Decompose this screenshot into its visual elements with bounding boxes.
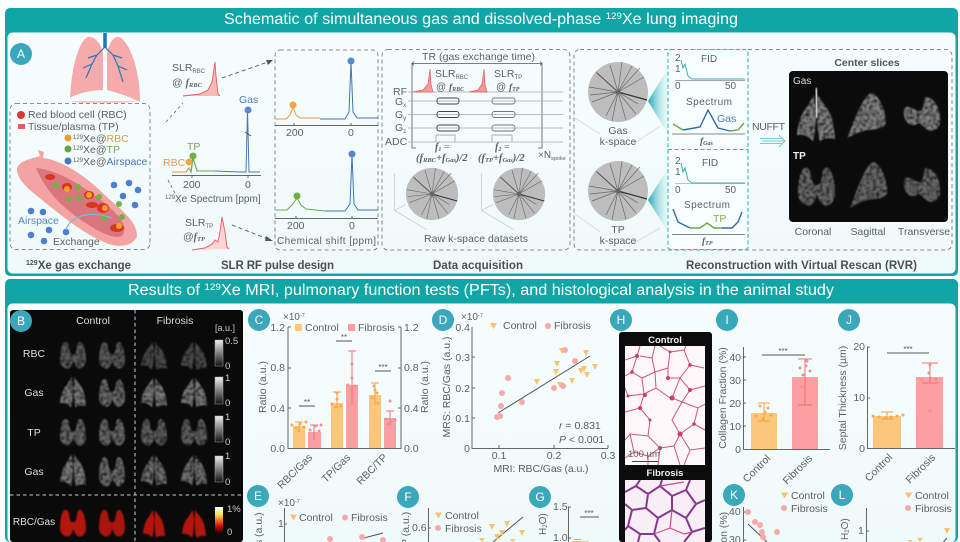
chart L: scatter (cropped): 1 <box>858 525 864 537</box>
chart J: septal thickness: Fibrosis <box>904 452 938 486</box>
label: SLR RBC sequence: SLR <box>435 68 455 80</box>
chart G: bars (cropped) <box>529 486 599 542</box>
formula: f2 <box>478 142 525 164</box>
panel H: histology: Control <box>648 335 682 346</box>
title: results: Xe MRI, pulmonary function tests (PFTs), and histological analysis in the animal study <box>221 282 834 299</box>
label: SLR RBC sequence: RBC <box>455 75 469 81</box>
chart E: scatter (cropped): -7 <box>295 499 300 505</box>
chart C: ratio bars: *** <box>378 363 388 372</box>
label: N spoke: ×N <box>538 150 551 161</box>
pulse sequence: G <box>395 96 403 108</box>
arrowhead TP <box>265 236 273 241</box>
chart C: ratio bars: ** <box>304 398 310 407</box>
panel: gas exchange box <box>10 104 150 250</box>
formula: f1: f <box>435 142 438 153</box>
title: schematic: Xe lung imaging <box>622 11 738 28</box>
formula: f2: TP <box>485 157 494 164</box>
chart L: scatter (cropped): Fibrosis <box>915 503 952 515</box>
panel B: MRI images <box>10 310 243 542</box>
legend: gas exchange: Airspace <box>107 156 148 168</box>
chart D: MRS vs MRI scatter: 0.3 <box>455 352 470 364</box>
legend: gas exchange: 129 <box>73 146 84 152</box>
chart C: ratio bars: 0.0 <box>404 443 419 455</box>
chart F: scatter (cropped): Fibrosis <box>445 523 482 535</box>
panel B: MRI images: RBC/Gas <box>13 517 55 528</box>
chart C: ratio bars: 0.8 <box>404 362 419 374</box>
chart D: MRS vs MRI scatter: MRI: RBC/Gas (a.u.) <box>494 463 588 475</box>
chart: 129Xe spectrum: 129 <box>165 195 176 201</box>
chart: gas spectrum: Gas <box>703 141 714 147</box>
title: schematic: 129 <box>606 11 622 22</box>
chart C: ratio bars: 0.4 <box>404 403 419 415</box>
panel B: MRI images: 0 <box>227 527 232 538</box>
chart I: collagen fraction: 30 <box>729 375 741 387</box>
chart: gas FID: 2 <box>675 53 681 64</box>
chart K: scatter (cropped) <box>718 484 828 542</box>
chart D: MRS vs MRI scatter: Control <box>503 320 537 332</box>
label: coronal: Coronal <box>795 226 831 238</box>
label: center slices: Center slices <box>834 57 900 69</box>
legend: gas exchange: 129 <box>73 135 84 141</box>
chart E: scatter (cropped) <box>247 485 388 542</box>
chart L: scatter (cropped): Control <box>915 490 949 502</box>
formula: f1 <box>416 142 468 164</box>
arrowhead <box>266 60 273 65</box>
chart J: septal thickness: 20 <box>853 341 865 353</box>
chart I: collagen fraction: 10 <box>729 421 741 433</box>
panel B: MRI images: 0.5 <box>225 336 238 347</box>
chart D: MRS vs MRI scatter: r = 0.831 <box>559 420 601 432</box>
chart: TP spectrum: TP <box>713 213 726 225</box>
chart C: ratio bars: C <box>255 313 264 327</box>
chart: TP spectrum <box>672 200 745 247</box>
chart L: scatter (cropped): O) <box>840 518 851 529</box>
pulse sequence: RF <box>393 86 407 98</box>
panel: schematic section <box>5 8 958 276</box>
chart E: scatter (cropped): ×10 <box>278 498 295 509</box>
chart: TP FID: 1 <box>675 167 681 178</box>
chart: gas FID: 50 <box>725 81 737 92</box>
chart J: septal thickness: 0 <box>859 443 865 455</box>
pulse sequence: G <box>395 109 403 121</box>
icon: lungs <box>70 33 140 103</box>
chart D: MRS vs MRI scatter: 0.1 <box>492 450 506 462</box>
chart: TP FID <box>675 156 745 196</box>
chart D: MRS vs MRI scatter: 0.4 <box>455 322 470 334</box>
chart K: scatter (cropped): K <box>730 488 738 502</box>
chart: gas spectrum <box>672 97 745 147</box>
label: TR: TR (gas exchange time) <box>422 51 535 63</box>
chart F: scatter (cropped): F <box>404 490 412 504</box>
pulse: RBC <box>183 62 220 96</box>
label: NUFFT: NUFFT <box>752 121 786 133</box>
chart C: ratio bars: 0.4 <box>270 403 285 415</box>
k-space: raw TP <box>482 168 545 230</box>
panel B: MRI images: 0 <box>225 437 230 448</box>
chart C: ratio bars: ** <box>341 333 347 342</box>
label: TP k-space: TP <box>611 224 625 236</box>
label: N spoke: spoke <box>551 156 566 162</box>
chart K: scatter (cropped): Control <box>791 490 825 502</box>
chart C: ratio bars: 1.2 <box>404 322 419 334</box>
chart E: scatter (cropped): Control <box>299 512 333 524</box>
panel B: MRI images: Gas <box>24 466 44 478</box>
label: exchange: Exchange <box>53 236 100 248</box>
chart: RBC spectrum <box>275 58 378 139</box>
label: at f RBC: RBC <box>188 82 203 89</box>
image panel: center slices: Gas <box>793 76 811 87</box>
legend: gas exchange: Tissue/plasma (TP) <box>28 121 119 133</box>
chart I: collagen fraction: 0 <box>735 444 741 456</box>
arrow: exchange <box>66 214 112 230</box>
panel: reconstruction <box>574 50 952 250</box>
chart C: ratio bars: 1.2 <box>270 322 285 334</box>
chart G: bars (cropped): 2 <box>543 524 549 528</box>
arrow: to RBC spectrum <box>222 62 268 78</box>
chart: RBC spectrum: 200 <box>286 127 304 139</box>
chart: 129Xe spectrum: TP <box>187 141 200 153</box>
chart: gas spectrum: Gas <box>717 113 736 125</box>
pulse sequence <box>385 69 563 148</box>
chart C: ratio bars: Fibrosis <box>358 322 395 334</box>
pulse sequence: G <box>395 122 403 134</box>
formula: f1: Gas <box>446 157 456 164</box>
title: schematic: Schematic of simultaneous gas and dissolved-phase <box>224 11 597 28</box>
formula: f1: (f <box>416 153 423 164</box>
formula: f1: = <box>441 142 450 153</box>
panel B: MRI images: Control <box>76 315 110 327</box>
panel: data acquisition <box>382 50 570 250</box>
legend: gas exchange: TP <box>107 144 120 156</box>
chart G: bars (cropped): 1.5 <box>553 501 568 513</box>
chart: 129Xe spectrum: 0 <box>245 179 251 191</box>
legend: gas exchange: 129 <box>73 158 84 164</box>
chart I: collagen fraction: Collagen Fraction (%) <box>717 347 729 449</box>
chart I: collagen fraction: 40 <box>729 352 741 364</box>
chart C: ratio bars: RBC/TP <box>354 452 390 487</box>
chart C: ratio bars: 0.0 <box>270 443 285 455</box>
label: at f RBC: @ f <box>172 77 189 89</box>
k-space: raw RBC <box>395 168 458 230</box>
legend: gas exchange: Xe@ <box>83 133 107 145</box>
formula: f2: Gas <box>502 157 513 164</box>
chart L: scatter (cropped): 2 <box>845 529 851 533</box>
chart J: septal thickness: Control <box>863 452 895 484</box>
chart J: septal thickness: Septal Thickness (µm) <box>837 346 849 450</box>
chart G: bars (cropped): H <box>538 528 549 535</box>
pulse sequence: y <box>403 116 406 122</box>
panel B: MRI images: [a.u.] <box>215 323 235 333</box>
panel B: MRI images: 0 <box>225 477 230 488</box>
pulse sequence: ADC <box>385 136 408 148</box>
airspace xenon particles <box>28 180 141 244</box>
chart: 129Xe spectrum: Gas <box>239 94 258 106</box>
panel B: MRI images: 0 <box>225 398 230 409</box>
chart G: bars (cropped): *** <box>584 509 594 518</box>
panel B: MRI images: 1% <box>227 504 241 515</box>
legend: gas exchange: RBC <box>107 133 129 145</box>
panel B: MRI images: 1 <box>225 412 230 423</box>
illustration: blood vessel <box>17 150 137 246</box>
label: gas k-space: Gas <box>608 125 628 137</box>
chart I: collagen fraction: I <box>725 313 729 327</box>
formula: f1: +f <box>436 153 447 164</box>
chart C: ratio bars: Ratio (a.u.) <box>419 361 431 413</box>
panel B: MRI images: TP <box>27 427 41 439</box>
chart: RBC spectrum: 0 <box>348 127 354 139</box>
chart E: scatter (cropped): Fibrosis <box>351 512 388 524</box>
pulse sequence: z <box>403 129 406 135</box>
panel B: MRI images: Gas <box>24 387 44 399</box>
heading: data acquisition: Data acquisition <box>433 260 523 272</box>
chart C: ratio bars: TP/Gas <box>319 452 353 485</box>
cone: gas <box>648 68 668 134</box>
chart D: MRS vs MRI scatter: 0.2 <box>547 450 561 462</box>
label: gas k-space: k-space <box>600 136 637 148</box>
chart F: scatter (cropped): Control <box>445 510 479 522</box>
chart: TP FID: 2 <box>675 156 681 167</box>
arrow: NUFFT <box>760 135 785 147</box>
label: SLR TP sequence: TP <box>514 75 522 81</box>
chart D: MRS vs MRI scatter: Fibrosis <box>554 320 591 332</box>
panel B: MRI images: 0 <box>225 361 230 372</box>
label: at f TP: @f <box>183 231 197 243</box>
formula: f2: )/2 <box>512 153 525 164</box>
label: transverse: Transverse <box>898 226 950 238</box>
chart J: septal thickness: *** <box>903 345 913 354</box>
chart L: scatter (cropped): H <box>840 533 851 540</box>
badge A: A <box>17 47 25 61</box>
chart C: ratio bars: RBC/Gas <box>275 452 315 491</box>
chart: 129Xe spectrum: Xe Spectrum [ppm] <box>175 194 261 205</box>
panel: results section <box>5 279 958 542</box>
chart C: ratio bars: 0.8 <box>270 362 285 374</box>
label: sagittal: Sagittal <box>850 226 886 238</box>
heading: SLR RF pulse design: SLR RF pulse design <box>221 260 334 272</box>
panel H: histology: Fibrosis <box>647 468 683 479</box>
formula: f2: +f <box>493 153 504 164</box>
panel: virtual rescan <box>668 50 748 250</box>
TR bracket <box>412 62 542 148</box>
chart L: scatter (cropped) <box>831 484 952 542</box>
chart D: MRS vs MRI scatter: D <box>439 313 448 327</box>
label: SLR RBC: RBC <box>192 69 206 75</box>
panel B: MRI images: Fibrosis <box>157 315 193 327</box>
panel H: histology: 100 µm <box>628 449 660 460</box>
chart: 129Xe spectrum: 200 <box>183 179 201 191</box>
chart I: collagen fraction <box>716 309 830 487</box>
chart F: scatter (cropped): 0.6 <box>412 522 427 534</box>
panel B: MRI images: B <box>17 314 25 328</box>
chart I: collagen fraction: 20 <box>729 398 741 410</box>
image panel: center slices <box>789 71 948 222</box>
chart: gas spectrum: Spectrum <box>686 97 732 108</box>
pulse: TP <box>192 217 229 250</box>
formula: f1: 1 <box>438 147 441 153</box>
formula: f2: 2 <box>497 147 501 153</box>
formula: f1: RBC <box>422 157 437 164</box>
chart: 129Xe spectrum: RBC <box>163 157 186 169</box>
chart: TP spectrum: TP <box>705 241 713 247</box>
chart L: scatter (cropped): L <box>839 488 846 502</box>
arrow: to TP spectrum <box>232 225 268 239</box>
chart G: bars (cropped): G <box>535 490 545 504</box>
heading: gas exchange: Xe gas exchange <box>38 260 131 272</box>
chart C: ratio bars: ×10 <box>283 312 300 323</box>
panel B: MRI images: 1 <box>225 451 230 462</box>
chart: TP FID: 0 <box>675 185 681 196</box>
chart: gas FID <box>675 53 745 92</box>
chart: TP spectrum: f <box>702 237 705 247</box>
chart E: scatter (cropped): 1 <box>278 518 284 530</box>
chart C: ratio bars: -7 <box>300 313 305 319</box>
chart J: septal thickness: 10 <box>853 392 865 404</box>
chart D: MRS vs MRI scatter: -7 <box>478 313 483 319</box>
heading: reconstruction: Reconstruction with Virtual Rescan (RVR) <box>686 260 917 272</box>
chart I: collagen fraction: *** <box>778 347 788 356</box>
label: raw k-space: Raw k-space datasets <box>424 233 528 245</box>
chart: gas FID: 0 <box>675 81 681 92</box>
legend: gas exchange: Xe@ <box>83 156 107 168</box>
chart J: septal thickness <box>837 309 955 486</box>
chart: TP spectrum: 0 <box>349 220 355 232</box>
chart F: scatter (cropped) <box>397 486 525 542</box>
chart C: ratio bars <box>248 309 431 491</box>
formula: f2: f <box>495 142 498 153</box>
chart: TP spectrum: 200 <box>287 220 305 232</box>
chart D: MRS vs MRI scatter: P < 0.001 <box>559 434 604 446</box>
label: SLR TP: TP <box>205 224 213 230</box>
k-space: TP <box>588 161 648 221</box>
legend: gas exchange <box>17 109 148 168</box>
chart K: scatter (cropped): 40 <box>729 506 741 518</box>
label: airspace: Airspace <box>18 215 59 227</box>
image panel: center slices: TP <box>793 151 806 162</box>
panel: chemical shift spectra <box>275 50 378 250</box>
chart: gas FID: FID <box>701 54 717 65</box>
chart D: MRS vs MRI scatter: MRS: RBC/Gas (a.u.) <box>441 337 453 437</box>
formula: f2: (f <box>478 153 485 164</box>
label: at f RBC sequence: RBC <box>451 87 465 93</box>
label: SLR RBC: SLR <box>172 62 192 74</box>
chart D: MRS vs MRI scatter: 0.2 <box>455 383 470 395</box>
chart: TP FID: FID <box>702 158 718 169</box>
chart: 129Xe spectrum <box>163 94 261 205</box>
formula: f2: = <box>501 142 510 153</box>
cone: TP <box>648 168 668 232</box>
legend: gas exchange: Red blood cell (RBC) <box>28 109 127 121</box>
k-space: gas <box>588 62 648 122</box>
decoration: k-space axes <box>575 118 660 244</box>
chart G: bars (cropped): O) <box>538 513 549 524</box>
label: SLR TP: SLR <box>185 217 205 229</box>
label: at f RBC sequence: @ f <box>436 82 452 93</box>
chart: TP spectrum <box>275 150 378 232</box>
panel B: MRI images: 1 <box>225 373 230 384</box>
chart K: scatter (cropped): Fibrosis <box>791 503 828 515</box>
chart: TP spectrum: Spectrum <box>684 200 730 211</box>
chart D: MRS vs MRI scatter: 0 <box>464 443 470 455</box>
legend: gas exchange: Xe@ <box>83 144 107 156</box>
title: results: 129 <box>204 282 221 293</box>
chart: gas spectrum: f <box>700 137 703 147</box>
chart: TP FID: 50 <box>725 185 737 196</box>
chart C: ratio bars: Control <box>305 322 339 334</box>
panel B: MRI images: RBC <box>23 348 46 360</box>
label: at f TP sequence: TP <box>512 87 520 93</box>
chart D: MRS vs MRI scatter: 0.3 <box>601 450 615 462</box>
chart D: MRS vs MRI scatter: ×10 <box>461 312 478 323</box>
axis label: chemical shift: Chemical shift [ppm] <box>277 236 376 247</box>
heading: gas exchange: 129 <box>26 260 38 267</box>
label: SLR TP sequence: SLR <box>494 68 514 80</box>
label: at f TP: TP <box>197 236 206 243</box>
chart I: collagen fraction: Fibrosis <box>781 453 815 487</box>
formula: f1: )/2 <box>455 153 468 164</box>
chart E: scatter (cropped): E <box>254 489 262 503</box>
panel H: histology <box>610 309 712 542</box>
label: TP k-space: k-space <box>600 235 637 247</box>
panel H: histology: H <box>617 313 625 327</box>
chart C: ratio bars: Ratio (a.u.) <box>257 361 269 413</box>
chart J: septal thickness: J <box>846 313 852 327</box>
chart: gas FID: 1 <box>675 64 681 75</box>
title: results: Results of <box>128 282 197 299</box>
badge A <box>10 43 32 65</box>
chart D: MRS vs MRI scatter: 0.1 <box>455 413 470 425</box>
dashed connector <box>166 103 183 195</box>
label: at f TP sequence: @ f <box>496 82 512 93</box>
chart I: collagen fraction: Control <box>741 453 773 485</box>
pulse sequence: x <box>403 103 406 109</box>
chart D: MRS vs MRI scatter <box>432 309 615 475</box>
